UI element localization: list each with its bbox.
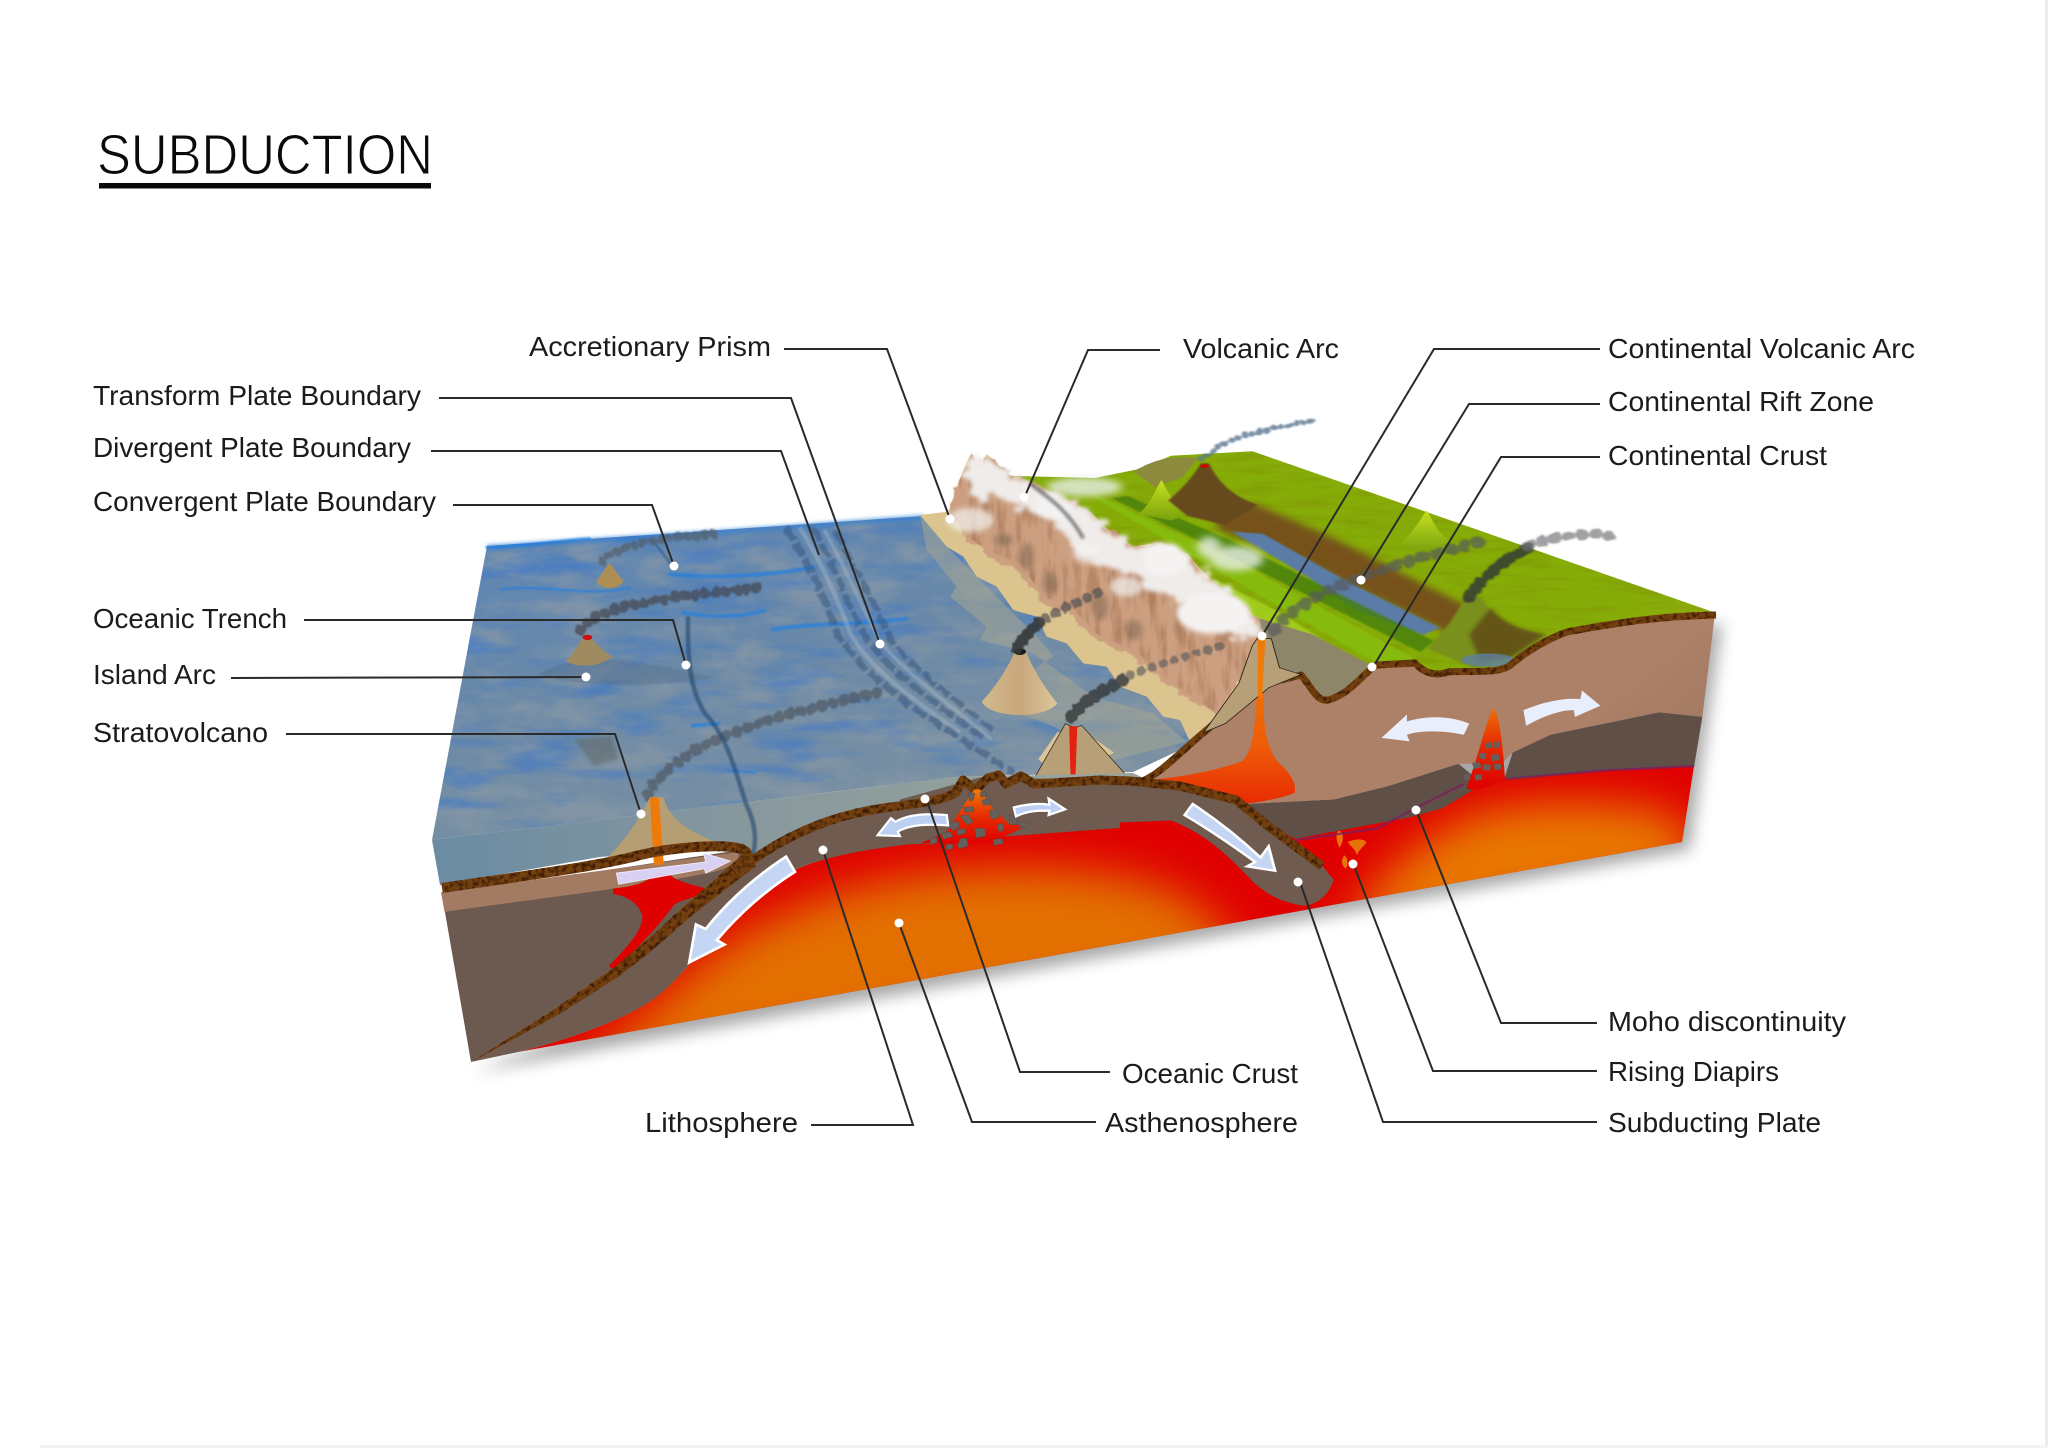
label: Island Arc: Island Arc [93,659,216,690]
leader: Volcanic Arc [1025,350,1160,496]
icon: green cone near ridge [1399,511,1456,552]
slab crust [750,775,1322,866]
label: Oceanic Trench: Oceanic Trench [93,603,287,634]
orange core glow [520,802,1710,1090]
icon: flow arrow slab [1185,804,1275,871]
cone crater [1014,648,1026,655]
conduit [1062,726,1087,824]
icon: island arc volcano [566,637,613,666]
leader: Divergent Plate Boundary [431,451,819,555]
icon: flow arrow ridge right [1014,799,1065,816]
panel: underwater coastal shelf [920,515,1187,760]
label: Rising Diapirs: Rising Diapirs [1608,1056,1779,1087]
plume: large volcano pale [1529,535,1621,545]
land plumes [1201,420,1621,630]
pond [1461,653,1515,667]
icon: large green volcano [1427,596,1548,668]
icon: brown volcano [1168,463,1258,525]
continental light crust [1139,615,1715,804]
rift water [1232,532,1439,635]
continent lower crust [1247,764,1475,839]
lime valley bands [1063,478,1415,663]
diapir rocks [1464,741,1502,780]
panel: continent volcano [1204,638,1301,733]
panel: left overriding plate [441,797,746,1062]
icon: crater lava [583,635,592,640]
valley slope between mountains and land [1247,616,1377,699]
panel: continental magma blob [1152,639,1295,805]
labels [93,331,1915,1138]
icon: coastal stratovolcano [608,797,721,858]
leader: Continental Volcanic Arc [1262,349,1600,636]
leader: Oceanic Crust [926,798,1110,1072]
leader: Transform Plate Boundary [439,398,880,644]
panel: spreading ridge magma and rocks [920,789,1029,850]
leader lines [231,349,1600,1125]
label: Lithosphere: Lithosphere [645,1107,798,1138]
icon: oceanic trench line [688,616,755,855]
panel: ocean surface [432,516,1200,840]
rift valley brown band [1209,503,1469,634]
leader: Island Arc [231,677,586,678]
3D block diagram [432,420,1716,1090]
panel: cross section water front [432,773,1170,885]
panel: continental green land surface [1008,451,1713,674]
upper light crust layer [441,852,739,912]
label: Continental Rift Zone: Continental Rift Zone [1608,386,1874,417]
icon: flow arrow upper plate [616,853,730,884]
ocean back edge highlight [487,517,924,547]
valley steam [1046,477,1263,571]
slab right half [900,777,1334,906]
label: Transform Plate Boundary: Transform Plate Boundary [93,380,421,411]
ocean details [487,527,1014,795]
back cone [1038,728,1114,779]
ocean volcano with conduit [1034,724,1129,824]
slab left half [471,778,1120,1062]
label: Oceanic Crust: Oceanic Crust [1122,1058,1298,1089]
label: Asthenosphere: Asthenosphere [1105,1107,1298,1138]
pink-brown slopes [948,454,1263,717]
Moho line [1293,766,1694,841]
label: Subducting Plate: Subducting Plate [1608,1107,1821,1138]
icon: small cone [596,563,624,588]
continental lower crust right [1504,712,1702,779]
foothills [920,454,1263,742]
icon: mantle flow arrow left [1381,715,1469,741]
leader: Continental Rift Zone [1361,404,1600,580]
icon: rising diapirs [1336,831,1366,869]
conduit orange [1258,638,1265,697]
magma wedge [920,789,1027,843]
label: Continental Crust: Continental Crust [1608,440,1827,471]
leader: Rising Diapirs [1353,863,1597,1071]
label: Moho discontinuity: Moho discontinuity [1608,1006,1846,1037]
leader: Convergent Plate Boundary [453,505,674,566]
mountain valley shadows [993,534,1143,640]
block drop shadow [474,622,1722,1072]
icon: red crater far [1200,464,1209,468]
convergent spur [652,540,673,566]
slope streaks [948,454,1263,713]
rock fragments [930,792,1029,850]
icon: green cone far [1139,480,1193,520]
volcano conduit [650,798,664,866]
plumes across mountains [1017,592,1230,717]
panel: subducting plate [471,615,1715,1062]
plumes over ocean [580,534,887,795]
panel: mountain range [920,454,1263,742]
leader: Oceanic Trench [304,620,686,665]
island arc halo [538,660,715,685]
snow ridge [962,454,1263,640]
leader: Asthenosphere [899,923,1096,1122]
left plate crust [442,846,749,888]
leader: Accretionary Prism [784,349,950,519]
volcano brown shade [1469,608,1545,661]
snow lobes [947,493,1250,634]
plume: far volcano [1201,420,1317,460]
plume: rift [1274,541,1485,630]
icon: mantle flow arrow right [1523,691,1600,726]
leader end dots [582,492,1420,928]
label: Continental Volcanic Arc: Continental Volcanic Arc [1608,333,1915,364]
leader: Continental Crust [1373,457,1600,667]
leader: Subducting Plate [1300,882,1597,1122]
continental crust [1140,615,1716,782]
leader: Stratovolcano [286,734,641,814]
panel: rising diapir column [1464,708,1505,790]
title: SUBDUCTION [97,123,433,187]
leader: Moho discontinuity [1416,810,1597,1023]
icon: far volcano mound [1133,457,1198,487]
panel: asthenosphere [519,766,1694,1052]
bright blue currents [487,538,907,773]
icon: flow arrow subduction [689,857,795,962]
lower cone on shelf [982,652,1057,715]
underwater debris patch [574,736,619,766]
grey ridge shadow [1030,483,1083,538]
parallel sea-floor ridges [786,527,1014,773]
label: Stratovolcano: Stratovolcano [93,717,268,748]
icon: flow arrow ridge left [878,814,948,836]
leader: Lithosphere [811,850,913,1125]
label: Accretionary Prism: Accretionary Prism [529,331,771,362]
panel: crust bands [442,615,1716,1062]
subduction diagonal crust [471,853,756,1062]
plume: large volcano dark [1469,547,1529,596]
label: Volcanic Arc: Volcanic Arc [1183,333,1339,364]
sea-floor ridge highlights [799,527,991,739]
main cone [1034,724,1129,778]
label: Divergent Plate Boundary: Divergent Plate Boundary [93,432,411,463]
subsurface magma chamber [609,872,707,972]
label: Convergent Plate Boundary: Convergent Plate Boundary [93,486,436,517]
